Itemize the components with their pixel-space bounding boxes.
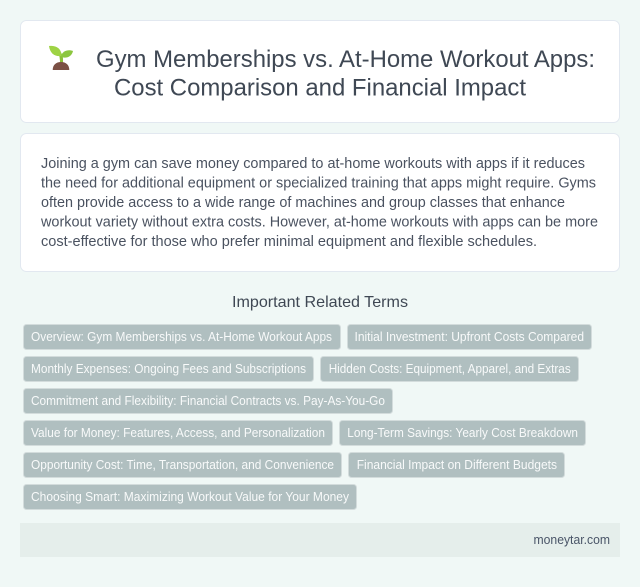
tag: choosing smart: Choosing Smart: Maximizing Workout Value for Your Money <box>31 489 350 504</box>
tag: overview: Overview: Gym Memberships vs. At-Home Workout Apps <box>31 329 332 344</box>
tag: monthly expenses <box>24 356 314 382</box>
tag: initial investment: Initial Investment: Upfront Costs Compared <box>354 329 584 344</box>
tag: long-term savings: Long-Term Savings: Yearly Cost Breakdown <box>347 425 578 440</box>
description text: cost-effective for those who prefer minimal equipment and flexible schedules. <box>41 233 537 250</box>
tag: commitment and flexibility <box>24 388 392 414</box>
title: Cost Comparison and Financial Impact <box>114 74 526 102</box>
heading: important related terms: Important Related Terms <box>232 294 408 311</box>
tag: opportunity cost <box>24 452 342 478</box>
tag: financial impact <box>348 452 564 478</box>
panel: description card <box>20 134 620 272</box>
description text: the need for additional equipment or specialized training that apps might require. Gyms <box>41 174 596 192</box>
tag: choosing smart <box>24 484 356 510</box>
tag: hidden costs <box>320 356 578 382</box>
icon: sprout <box>49 46 73 70</box>
title: Gym Memberships vs. At-Home Workout Apps: <box>96 46 595 73</box>
footer <box>20 523 620 557</box>
tag: financial impact: Financial Impact on Different Budgets <box>357 457 557 472</box>
description text: often provide access to a wide range of machines and group classes that enhance <box>41 194 565 211</box>
tag: opportunity cost: Opportunity Cost: Time, Transportation, and Convenience <box>31 457 334 472</box>
tag: commitment and flexibility: Commitment and Flexibility: Financial Contracts vs. Pay-As-You-Go <box>31 393 385 408</box>
tag: value for money: Value for Money: Features, Access, and Personalization <box>31 425 325 440</box>
tag: value for money <box>24 420 332 446</box>
tags: related terms <box>24 324 592 510</box>
footer source text: moneytar.com <box>534 533 610 547</box>
tag: hidden costs: Hidden Costs: Equipment, Apparel, and Extras <box>329 361 571 376</box>
tag: long-term savings <box>340 420 586 446</box>
tag: monthly expenses: Monthly Expenses: Ongoing Fees and Subscriptions <box>31 361 306 376</box>
description text <box>40 155 598 250</box>
tag: overview <box>24 324 340 350</box>
description text: Joining a gym can save money compared to at-home workouts with apps if it reduces <box>41 155 585 172</box>
description text: workout variety without extra costs. However, at-home workouts with apps can be more <box>40 214 598 230</box>
tag: initial investment <box>348 324 592 350</box>
title <box>96 46 595 102</box>
panel: title card <box>20 20 620 122</box>
